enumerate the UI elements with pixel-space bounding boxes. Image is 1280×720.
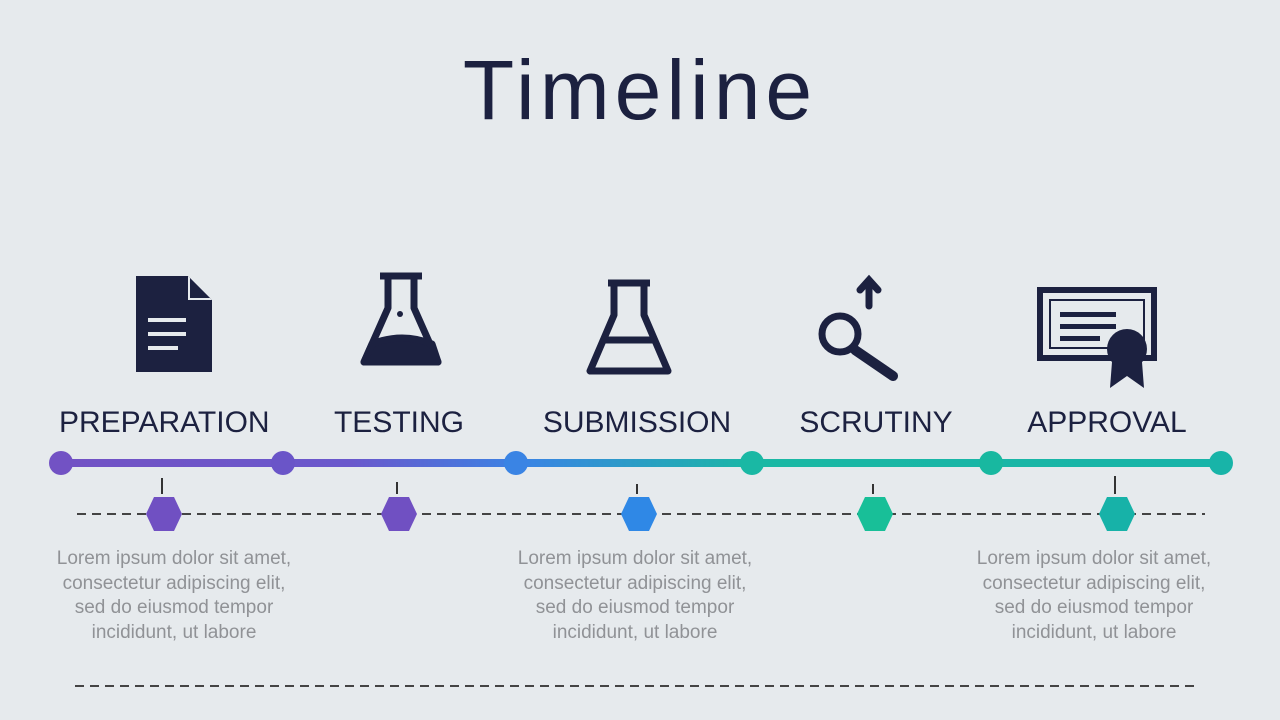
icon: flask testing: [364, 276, 438, 362]
text block 2: [518, 548, 752, 642]
labels: PREPARATION: [59, 406, 270, 439]
text block 3: incididunt, ut labore: [1012, 622, 1176, 642]
icon: flask submission: [590, 283, 668, 371]
text: APPROVAL: [1027, 406, 1187, 439]
text block 1: Lorem ipsum dolor sit amet,: [57, 548, 291, 569]
text block 1: incididunt, ut labore: [92, 622, 256, 642]
text block 3: [977, 548, 1211, 642]
text block 3: consectetur adipiscing elit,: [983, 572, 1205, 594]
icon: document: [136, 276, 212, 372]
title: Timeline: [463, 43, 817, 137]
hexagon markers: [146, 476, 1135, 531]
text block 2: consectetur adipiscing elit,: [524, 572, 746, 594]
main line: [49, 451, 1233, 475]
text block 2: sed do eiusmod tempor: [536, 597, 734, 618]
text block 2: incididunt, ut labore: [553, 622, 717, 642]
text block 1: consectetur adipiscing elit,: [63, 572, 285, 594]
text block 1: sed do eiusmod tempor: [75, 597, 273, 618]
text block 2: Lorem ipsum dolor sit amet,: [518, 548, 752, 569]
dashed lines: [75, 514, 1205, 686]
text block 3: Lorem ipsum dolor sit amet,: [977, 548, 1211, 569]
icon: magnifier: [822, 280, 893, 376]
text: SCRUTINY: [799, 406, 953, 439]
icon: certificate: [1040, 290, 1154, 388]
text block 3: sed do eiusmod tempor: [995, 597, 1193, 618]
text: SUBMISSION: [543, 406, 731, 439]
text: TESTING: [334, 406, 464, 439]
text block 1: [57, 548, 291, 642]
